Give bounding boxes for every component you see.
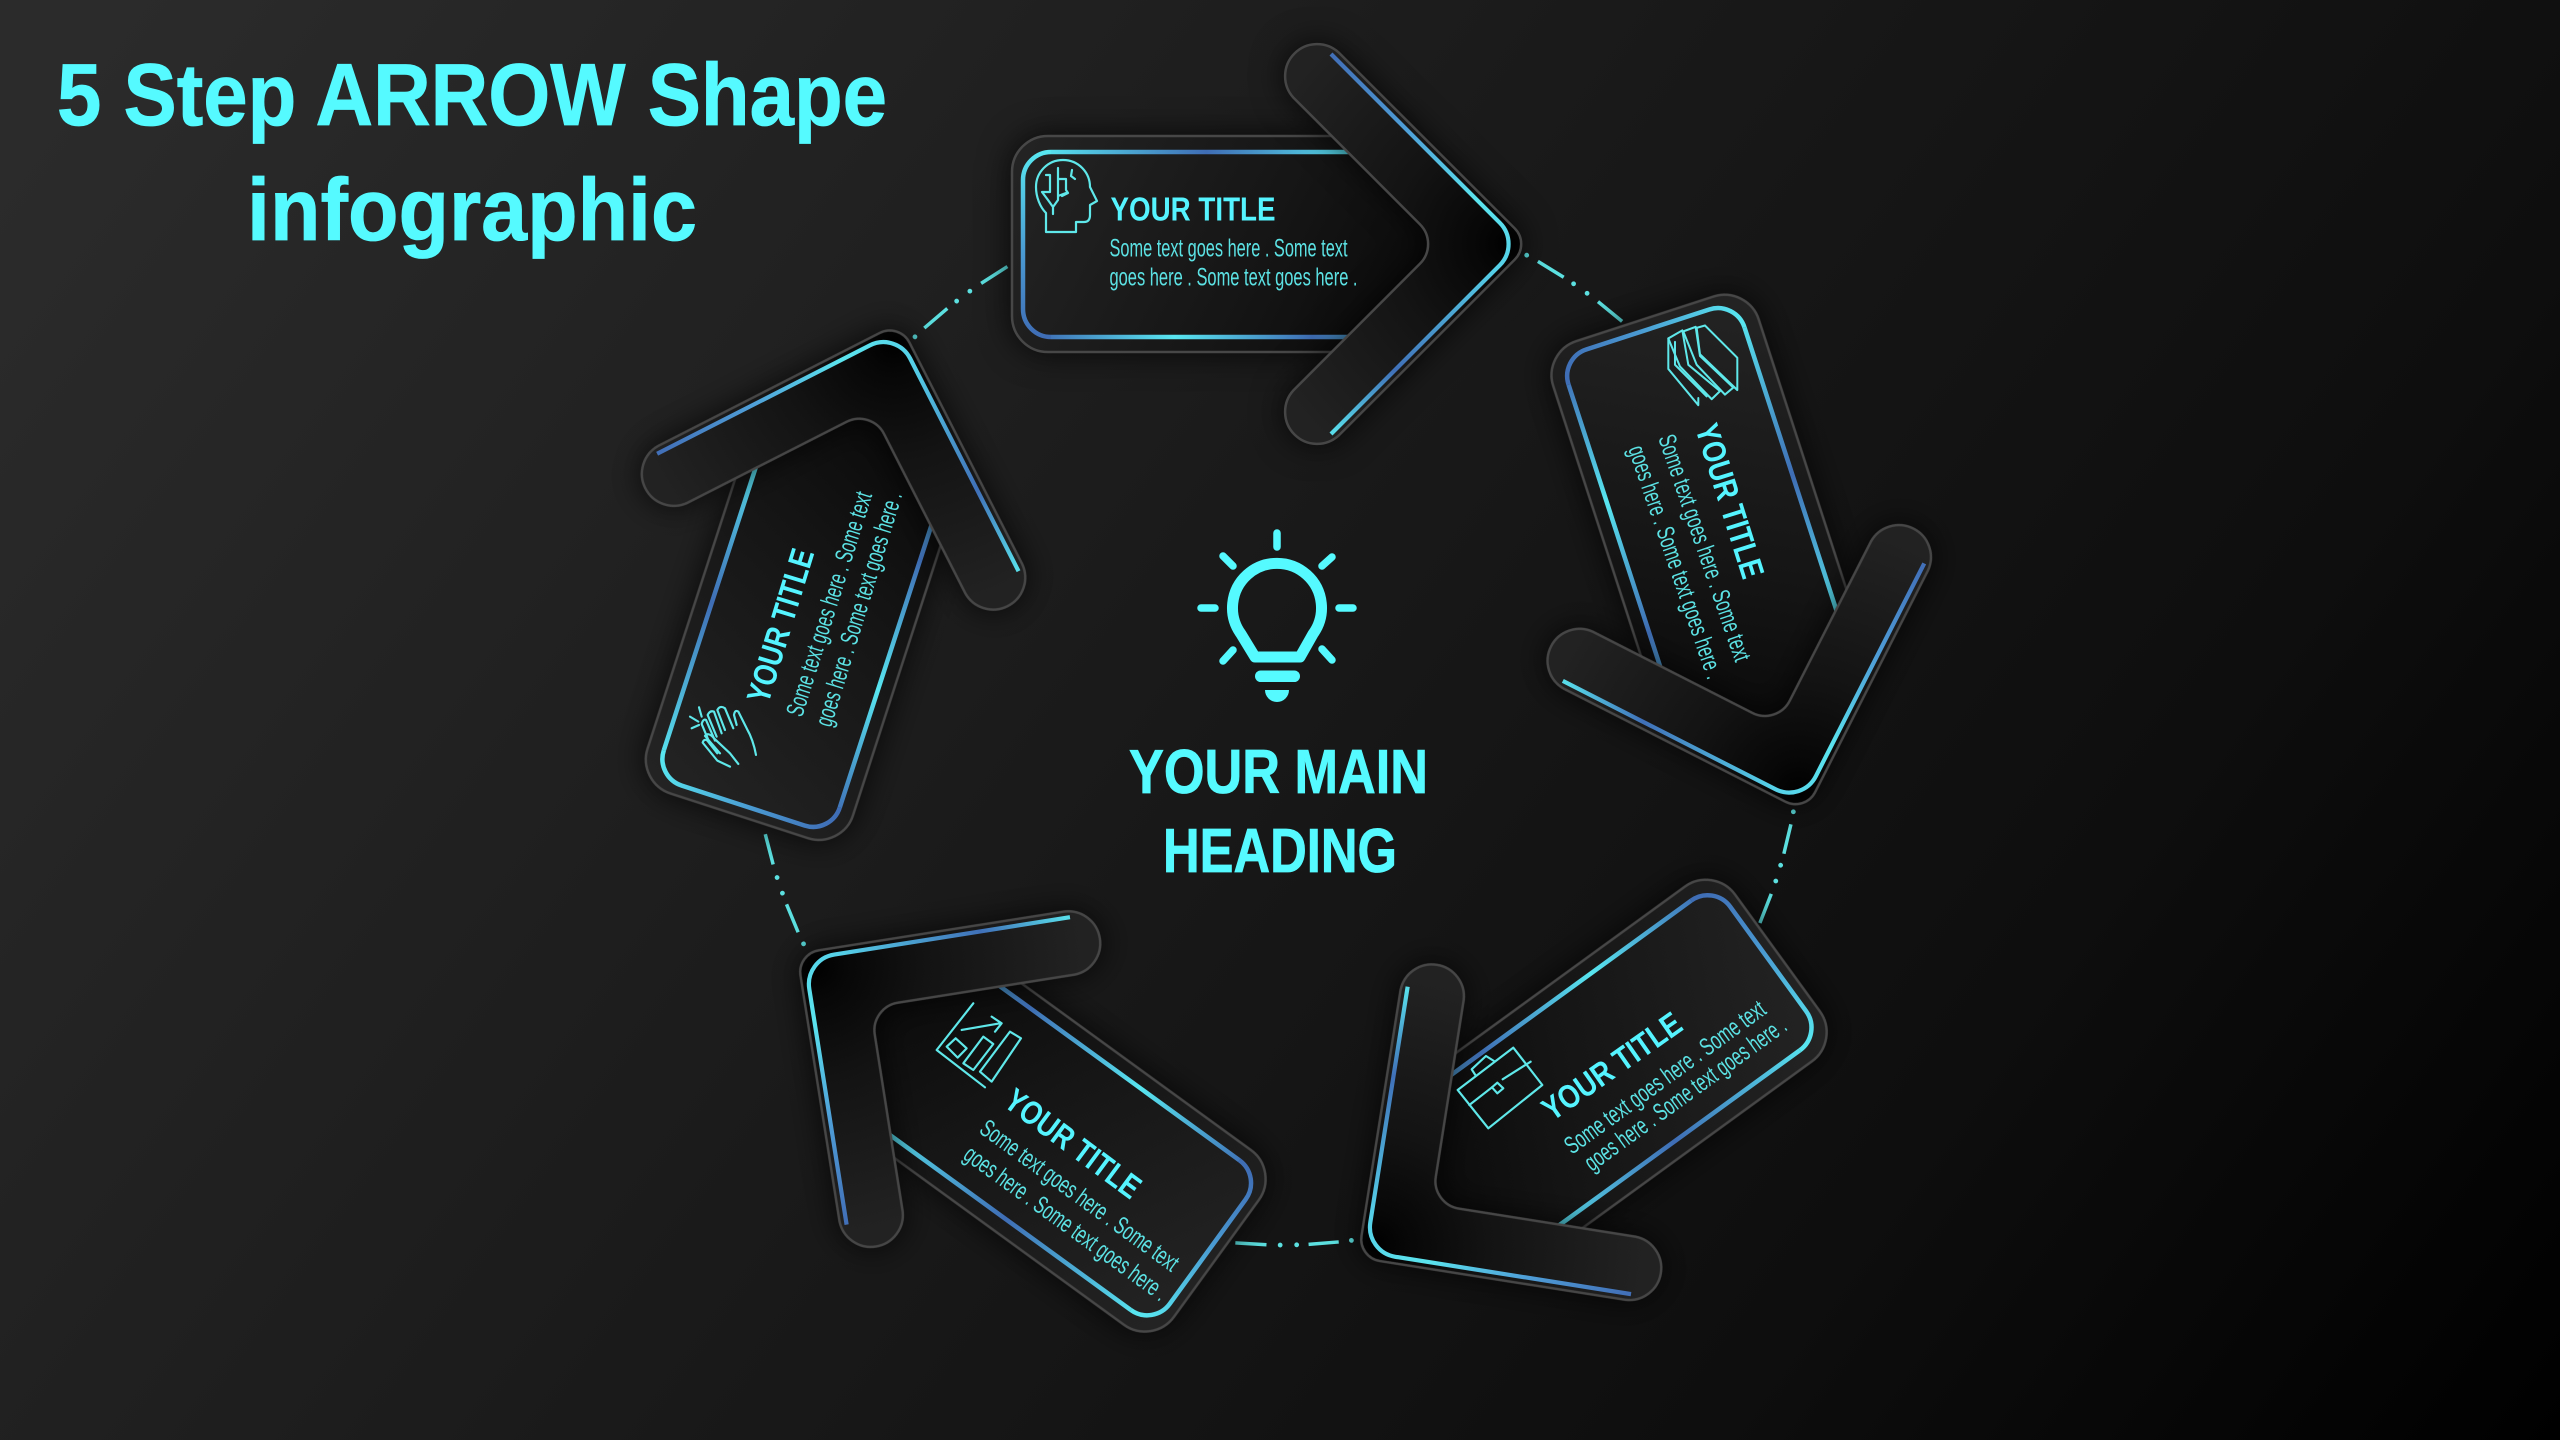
step 3 title: YOUR TITLE	[1535, 1005, 1689, 1128]
step 5 chevron arrowhead	[634, 270, 1087, 618]
main heading: HEADING	[1163, 817, 1397, 886]
step 1 text: goes here . Some text goes here .	[1110, 264, 1358, 292]
step 2 title: YOUR TITLE	[1688, 419, 1772, 583]
step 1 plate	[1012, 136, 1440, 352]
icon: light bulb	[1201, 533, 1353, 702]
panel: step 4 arrow	[687, 797, 1280, 1346]
step 1 chevron arrowhead	[1285, 44, 1521, 444]
step 2 text: goes here . Some text goes here .	[1622, 442, 1729, 683]
step 4 title: YOUR TITLE	[998, 1081, 1148, 1206]
step 5 text: Some text goes here . Some text	[781, 488, 878, 720]
main heading	[1129, 738, 1428, 886]
icon: clapping hands	[690, 707, 756, 767]
step 2 plate	[1542, 285, 1880, 759]
step 1 title: YOUR TITLE	[1110, 190, 1276, 228]
panel: step 3 arrow	[1248, 866, 1841, 1414]
dashed connector: step 2 to step 3	[1730, 809, 1825, 923]
step 5 title: YOUR TITLE	[739, 544, 821, 707]
title: infographic	[247, 160, 697, 259]
icon: briefcase	[1458, 1048, 1542, 1128]
dashed connector: step 4 to step 5	[725, 834, 844, 947]
title	[57, 45, 887, 259]
step 3 text: Some text goes here . Some text	[1559, 995, 1771, 1160]
step 5 plate	[637, 375, 974, 849]
panel: step 5 arrow	[634, 270, 1087, 849]
title: 5 Step ARROW Shape	[57, 45, 887, 144]
step 3 text: goes here . Some text goes here .	[1579, 1011, 1792, 1177]
main heading: YOUR MAIN	[1129, 738, 1428, 807]
step 2 text	[1622, 431, 1756, 683]
dashed connector: step 3 to step 4	[1235, 1185, 1355, 1298]
step 2 chevron arrowhead	[1539, 517, 1992, 865]
step 1 text	[1110, 234, 1358, 292]
step 4 plate	[807, 919, 1280, 1346]
step 3 plate	[1368, 866, 1841, 1292]
icon: bar chart with rising arrow	[937, 1003, 1021, 1087]
step 2 text: Some text goes here . Some text	[1652, 431, 1756, 665]
icon: stacked books	[1668, 325, 1737, 405]
panel: step 1 arrow	[1012, 44, 1521, 444]
step 4 text: goes here . Some text goes here .	[958, 1140, 1173, 1307]
step 5 text: goes here . Some text goes here .	[810, 488, 908, 730]
icon: head with circuit brain	[1036, 160, 1097, 232]
step 4 chevron arrowhead	[687, 797, 1113, 1260]
step 5 text	[781, 488, 908, 730]
step 3 chevron arrowhead	[1248, 952, 1674, 1414]
step 4 text	[958, 1114, 1184, 1307]
step 1 text: Some text goes here . Some text	[1110, 234, 1348, 262]
step 3 text	[1559, 995, 1792, 1177]
dashed connector: step 5 to step 1	[912, 245, 1007, 360]
dashed connector: step 1 to step 2	[1524, 253, 1622, 321]
step 4 text: Some text goes here . Some text	[974, 1114, 1184, 1277]
panel: step 2 arrow	[1539, 285, 1992, 865]
